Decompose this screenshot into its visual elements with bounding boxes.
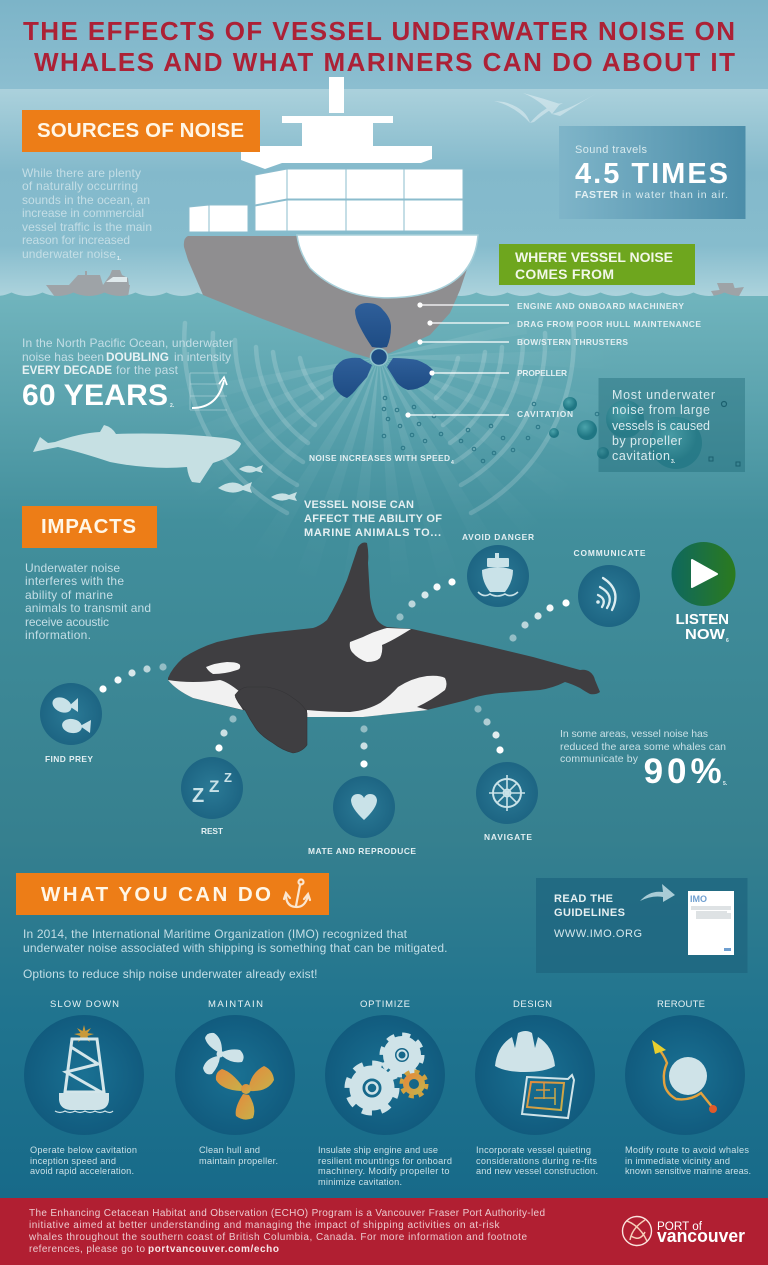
icon: rest: Z [209,777,219,796]
noise source labels: ENGINE AND ONBOARD MACHINERY [517,301,684,311]
option: slow down [24,999,144,1176]
sources of noise heading: SOURCES OF NOISE [37,119,244,142]
text: vessel noise can affect [304,499,442,539]
containers [189,169,463,232]
impacts heading [22,506,157,548]
document thumbnail [688,891,734,955]
icon: blueprint [522,1075,574,1118]
callout: read the guidelines: READ THE [554,893,613,905]
icon: rest: Z [192,785,204,807]
text: doubling every decade: for the past [116,363,179,377]
large cavitation bubbles [549,397,609,459]
text: vessel noise can affect: AFFECT THE ABILITY OF [304,513,442,525]
text: impacts: Underwater noise [25,561,120,575]
button: listen now [672,542,736,644]
text: doubling every decade: in intensity [174,350,231,364]
footer text: portvancouver.com/echo [148,1244,279,1255]
callout: 90 percent: 90% [644,752,722,791]
option: maintain: maintain propeller. [199,1156,278,1166]
concentric noise arcs [184,323,574,513]
noise source labels [405,301,701,419]
text: doubling every decade [22,336,233,412]
noise source labels: BOW/STERN THRUSTERS [517,337,628,347]
text: doubling every decade: 60 YEARS [22,379,168,412]
icon: route around whale [652,1040,717,1113]
icon: cruise ship silhouette [46,270,130,297]
orca pectoral fin [235,687,307,753]
text: impacts: receive acoustic [25,615,109,629]
footer text: The Enhancing Cetacean Habitat and Observation (ECHO) Program is a Vancouver Fraser Port Authority-led [29,1208,545,1219]
callout: sound travels [559,126,746,219]
impacts heading: IMPACTS [41,515,136,538]
text: impacts: information. [25,628,91,642]
footer text: whales throughout the southern coast of British Columbia, Canada. For more information and footnote [28,1232,527,1243]
callout: 90 percent: communicate by [560,753,639,765]
icon: mate and reproduce: MATE AND REPRODUCE [308,846,416,856]
callout: 90 percent: reduced the area some whales can [560,741,726,753]
icon: buoy [55,1025,113,1112]
port of vancouver logo: vancouver [657,1225,745,1246]
footer text: initiative aimed at better understanding and managing the impact of shipping activities on at-risk [29,1220,501,1231]
icon: avoid danger [462,532,534,607]
orca [168,542,600,753]
fish silhouettes [218,465,297,501]
mini chart: rising noise [190,373,227,410]
where vessel noise comes from heading: WHERE VESSEL NOISE [515,249,673,265]
noise increases label: NOISE INCREASES WITH SPEED [309,453,450,463]
where vessel noise comes from heading: COMES FROM [515,266,614,282]
icon: avoid danger: AVOID DANGER [462,532,534,542]
title: THE EFFECTS OF VESSEL UNDERWATER NOISE ON [23,16,735,46]
text: vessel noise can affect: VESSEL NOISE CAN [304,499,414,511]
title: WHALES AND WHAT MARINERS CAN DO ABOUT IT [34,47,735,77]
footer text: references, please go to [29,1244,145,1255]
callout: sound travels: in water than in air. [622,189,728,201]
icon: communicate [574,548,646,627]
icon: arrow to document [640,884,675,902]
button: listen now: LISTEN [676,611,729,628]
text: Insulate ship engine and use [318,1145,438,1155]
sound rays [122,321,639,617]
callout: read the guidelines: GUIDELINES [554,907,625,919]
callout: read the guidelines [536,878,748,973]
text: impacts: ability of marine [25,588,113,602]
option: slow down: inception speed and [30,1156,116,1166]
text: impacts [25,561,151,642]
callout: propeller cavitation: noise from large [612,403,710,417]
text: sources of noise: sounds in the ocean, an [22,193,150,207]
where vessel noise comes from heading [499,244,695,285]
propeller [333,303,433,398]
icon: communicate: COMMUNICATE [574,548,646,558]
option: slow down: avoid rapid acceleration. [30,1166,134,1176]
option: slow down: Operate below cavitation [30,1145,137,1155]
hull [184,236,478,358]
ship superstructure [241,77,432,169]
callout: 90 percent: In some areas, vessel noise has [560,728,708,740]
waves [0,292,740,300]
option: design [475,999,598,1176]
icon: rest: Z [224,770,232,785]
text: sources of noise: underwater noise [22,247,116,261]
text: vessel noise can affect: MARINE ANIMALS TO... [304,527,441,539]
text: what you can do: underwater noise associated with shipping is something that can be mitigated. [23,941,448,955]
callout: propeller cavitation: vessels is caused [612,419,710,433]
option: maintain: Clean hull and [199,1145,260,1155]
text: sources of noise [22,166,152,262]
text: doubling every decade: DOUBLING [106,350,169,364]
orca belly [307,676,446,717]
callout: propeller cavitation: 3. [671,459,676,465]
text: impacts: interferes with the [25,574,124,588]
port of vancouver logo: PORT of [657,1221,703,1233]
icon: clean and fouled propellers [203,1033,274,1120]
orca eye patch [206,662,240,674]
option: reroute: in immediate vicinity and [625,1156,730,1166]
button: listen now: 6 [726,638,729,644]
bow bulb [297,235,478,298]
callout: 90 percent: 5. [723,781,728,787]
icon: find prey: FIND PREY [45,754,93,764]
option: reroute: Modify route to avoid whales [625,1145,749,1155]
option: optimize: OPTIMIZE [360,999,410,1010]
callout: sound travels: FASTER [575,189,618,201]
option: design: DESIGN [513,999,552,1010]
footer text [28,1208,545,1255]
text: sources of noise: increase in commercial [22,206,144,220]
option: reroute: REROUTE [657,999,705,1010]
icon: rest [181,757,243,836]
icon: navigate [476,762,538,842]
footer band [0,1198,768,1265]
text: sources of noise: reason for increased [22,233,130,247]
callout: propeller cavitation: by propeller [612,434,682,448]
cargo ship [184,77,478,358]
text: doubling every decade: In the North Pacific Ocean, underwater [22,336,233,350]
icon: small boat silhouette [711,283,744,298]
text: machinery. Modify propeller to [318,1166,450,1176]
text: resilient mountings for onboard [318,1156,452,1166]
option: reroute: known sensitive marine areas. [625,1166,751,1176]
noise source labels: CAVITATION [517,409,573,419]
option: reroute [625,999,751,1176]
sources of noise heading [22,110,260,152]
icon: rest: REST [201,826,224,836]
callout: propeller cavitation [598,378,745,472]
noise source labels: PROPELLER [517,368,567,378]
text: what you can do: In 2014, the International Maritime Organization (IMO) recognized that [23,927,408,941]
option: design: Incorporate vessel quieting [476,1145,591,1155]
port of vancouver logo [622,1216,745,1246]
humpback whale silhouette [33,425,241,483]
text: what you can do: Options to reduce ship noise underwater already exist! [23,967,318,981]
text: what you can do [23,927,448,981]
text: sources of noise: While there are plenty [22,166,141,180]
small cavitation bubbles [382,396,599,463]
option: maintain: MAINTAIN [208,999,263,1010]
text: minimize cavitation. [318,1177,402,1187]
title [23,16,735,77]
option: slow down: SLOW DOWN [50,999,119,1010]
icon: seagulls [494,93,597,123]
icon: anchor [284,880,310,907]
text: sources of noise: 1. [117,256,122,262]
dotted connectors [99,578,570,768]
what you can do heading [16,873,329,915]
callout: sound travels: Sound travels [575,144,648,156]
icon: gears [348,1035,426,1112]
text: sources of noise: vessel traffic is the main [22,220,152,234]
option: optimize [325,999,445,1135]
option: design: considerations during re-fits [476,1156,597,1166]
noise source labels: DRAG FROM POOR HULL MAINTENANCE [517,319,701,329]
noise increases label: 4 [451,460,454,466]
callout: read the guidelines: WWW.IMO.ORG [554,928,642,940]
orca body [168,542,600,717]
callout: propeller cavitation: Most underwater [612,388,715,402]
icon: mate and reproduce [308,776,416,856]
option: maintain [175,999,295,1166]
icon: navigate: NAVIGATE [484,832,532,842]
orca saddle patch [350,628,411,662]
icon: find prey [40,683,102,764]
callout: sound travels: 4.5 TIMES [575,158,728,190]
text: impacts: animals to transmit and [25,601,151,615]
text: sources of noise: of naturally occurring [22,179,138,193]
text: doubling every decade: noise has been [22,350,104,364]
text: doubling every decade: 2. [170,403,175,409]
orca jaw [168,680,243,710]
callout: propeller cavitation: cavitation [612,449,670,463]
callout: 90 percent [560,728,728,791]
what you can do heading: WHAT YOU CAN DO [41,883,271,906]
text: doubling every decade: EVERY DECADE [22,363,112,377]
button: listen now: NOW [685,626,726,643]
document thumbnail: IMO [690,894,707,904]
icon: hard hat [495,1031,555,1072]
option: design: and new vessel construction. [476,1166,598,1176]
